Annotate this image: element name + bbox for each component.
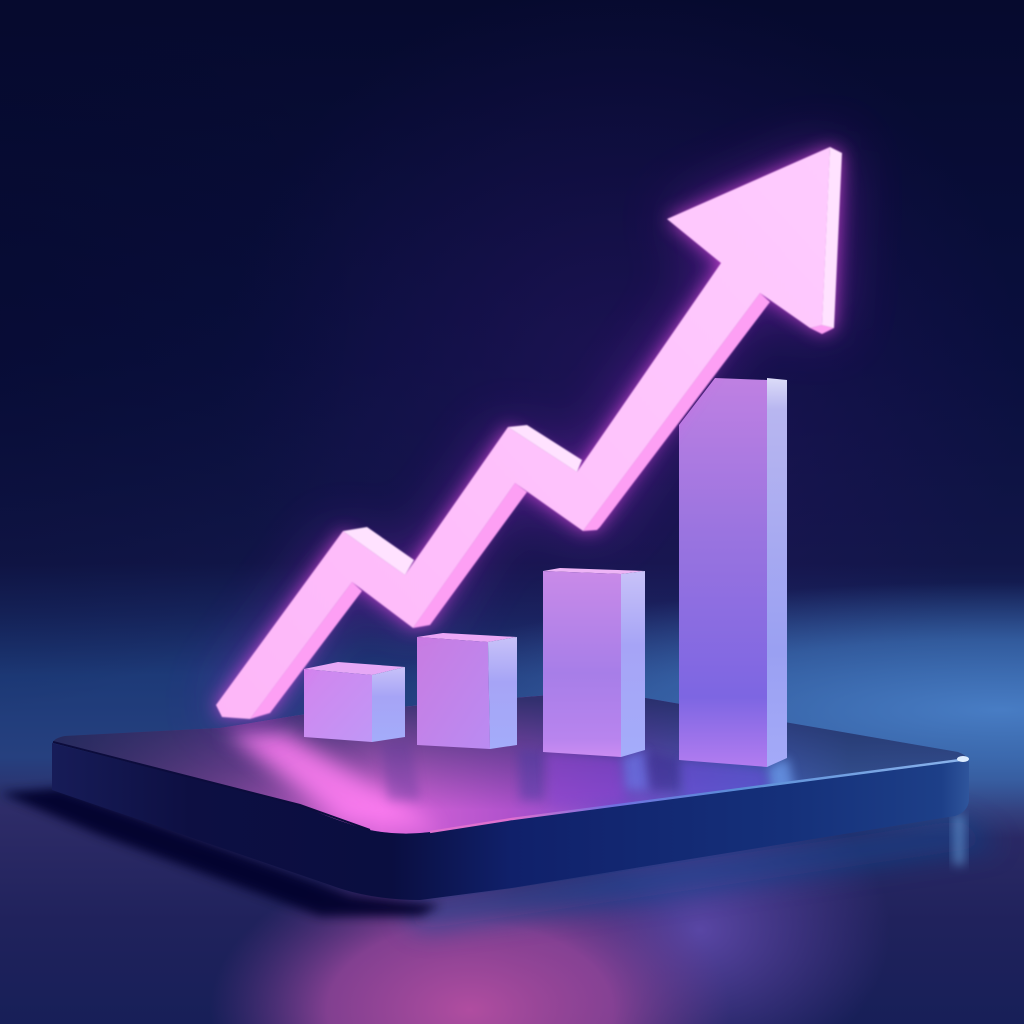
platform top surface — [54, 696, 966, 834]
bar 3 — [543, 568, 645, 757]
platform front edge highlight — [430, 759, 968, 832]
platform base — [40, 680, 980, 900]
bar 2 — [417, 633, 517, 749]
arrow body — [216, 147, 842, 719]
platform shadow — [0, 788, 440, 916]
arrow underside faces — [250, 293, 834, 719]
arrow — [216, 147, 842, 719]
wide arrow glow — [216, 147, 842, 717]
arrow front face — [216, 147, 830, 719]
bar 4 — [679, 378, 787, 767]
floor reflections — [0, 815, 1024, 1024]
arrow top bevels — [343, 147, 842, 575]
platform corner glint — [957, 756, 969, 762]
arrow glow — [216, 147, 842, 717]
platform side — [52, 743, 969, 900]
bar 1 — [304, 662, 405, 742]
platform dark rear-left rim — [53, 742, 370, 830]
